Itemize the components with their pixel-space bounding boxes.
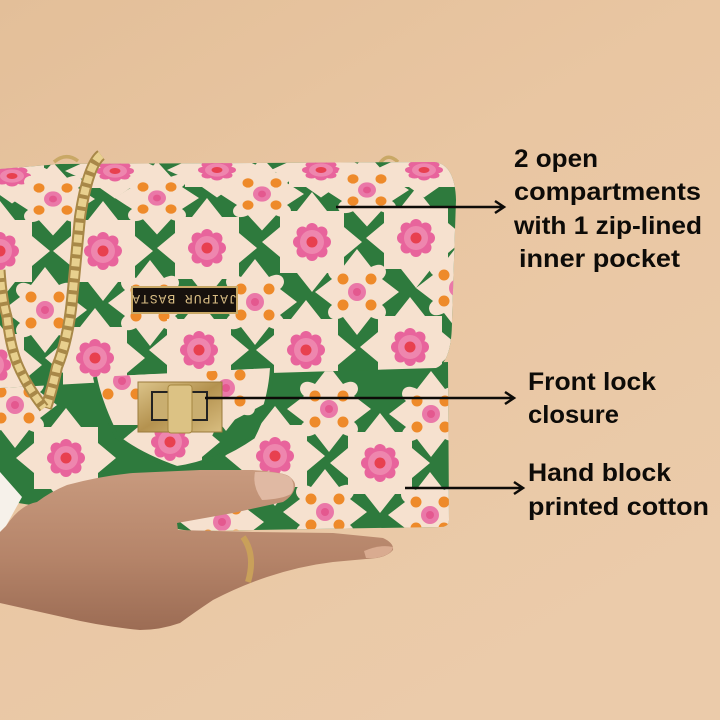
brand label: JAIPUR BASTA (131, 291, 237, 306)
bag front flap (0, 162, 456, 388)
text: compartments (514, 178, 701, 206)
lock tab (93, 368, 270, 466)
arrow (405, 482, 523, 494)
text: printed cotton (528, 493, 709, 521)
icon: chain behind bag top (54, 157, 398, 163)
arrow (336, 201, 504, 213)
panel: clutch bag (0, 162, 456, 531)
callout: compartments (336, 145, 702, 273)
text: Front lock (528, 368, 656, 396)
text: inner pocket (519, 245, 681, 273)
brand label (131, 287, 237, 313)
sleeve (0, 472, 22, 532)
icon: gold chain strap (0, 155, 101, 408)
text: with 1 zip-lined (513, 212, 702, 240)
text: closure (528, 401, 619, 429)
text (528, 459, 709, 521)
text: 2 open (514, 145, 598, 173)
text (528, 368, 656, 429)
bag lower body (0, 362, 449, 531)
callout: fabric (405, 459, 709, 521)
icon: hand holding bag (0, 470, 393, 630)
text (513, 145, 702, 273)
callout: lock closure (205, 368, 656, 429)
arrow (205, 392, 514, 404)
icon: turn lock (138, 382, 222, 433)
text: Hand block (528, 459, 671, 487)
